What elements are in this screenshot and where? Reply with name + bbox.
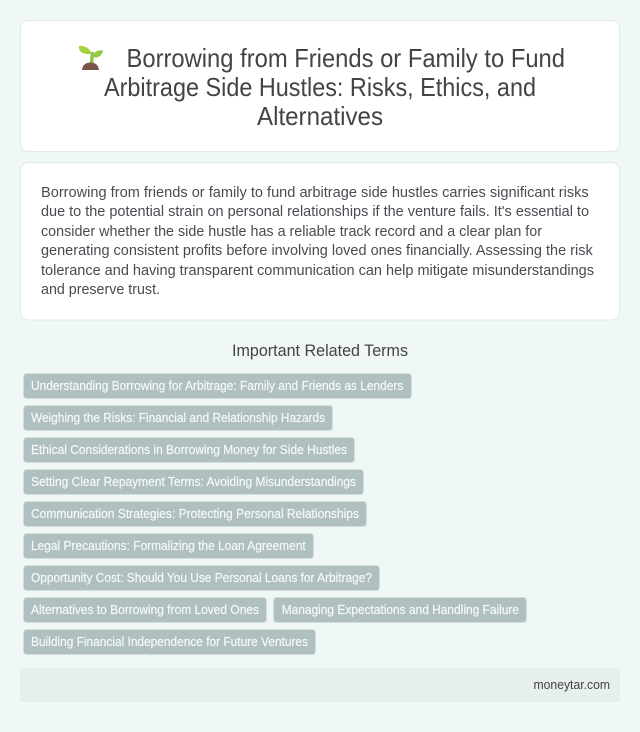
summary line 3: consider whether the side hustle has a reliable track record and a clear plan for bbox=[41, 223, 542, 240]
tag: opportunity cost: Opportunity Cost: Should You Use Personal Loans for Arbitrage? bbox=[31, 570, 372, 585]
tag: alternatives: Alternatives to Borrowing from Loved Ones bbox=[31, 602, 259, 617]
tag: communication strategies: Communication Strategies: Protecting Personal Relationships bbox=[31, 506, 359, 521]
tag: ethical considerations bbox=[24, 438, 354, 462]
summary line 2: due to the potential strain on personal relationships if the venture fails. It's essential to bbox=[41, 203, 589, 220]
tag: managing expectations bbox=[274, 598, 526, 622]
title line 1: Borrowing from Friends or Family to Fund bbox=[126, 43, 565, 73]
summary line 5: tolerance and having transparent communication can help mitigate misunderstandings bbox=[41, 262, 594, 279]
tag: understanding borrowing bbox=[24, 374, 412, 398]
tag: weighing the risks bbox=[24, 406, 332, 430]
title line 2: Arbitrage Side Hustles: Risks, Ethics, and bbox=[104, 72, 536, 102]
panel: title card bbox=[20, 20, 620, 152]
icon: seedling bbox=[79, 46, 103, 70]
tag: understanding borrowing: Understanding Borrowing for Arbitrage: Family and Friends as Lenders bbox=[31, 378, 404, 393]
tag: opportunity cost bbox=[24, 566, 380, 590]
footer bar bbox=[20, 668, 620, 702]
summary line 6: and preserve trust. bbox=[41, 281, 160, 298]
tag: ethical considerations: Ethical Considerations in Borrowing Money for Side Hustles bbox=[31, 442, 347, 457]
panel: summary card bbox=[20, 162, 620, 320]
tag: alternatives bbox=[24, 598, 266, 622]
tag: financial independence bbox=[24, 630, 316, 654]
summary line 1: Borrowing from friends or family to fund arbitrage side hustles carries significant risks bbox=[41, 184, 589, 201]
tag: weighing the risks: Weighing the Risks: Financial and Relationship Hazards bbox=[31, 410, 325, 425]
tag: financial independence: Building Financial Independence for Future Ventures bbox=[31, 634, 308, 649]
tag list bbox=[24, 374, 526, 654]
tag: legal precautions bbox=[24, 534, 314, 558]
tag: repayment terms bbox=[24, 470, 364, 494]
tag: legal precautions: Legal Precautions: Formalizing the Loan Agreement bbox=[31, 538, 306, 553]
footer source text: moneytar.com bbox=[534, 677, 610, 692]
tag: communication strategies bbox=[24, 502, 366, 526]
tag: repayment terms: Setting Clear Repayment Terms: Avoiding Misunderstandings bbox=[31, 474, 356, 489]
summary line 4: generating consistent profits before involving loved ones financially. Assessing the risk bbox=[41, 242, 593, 259]
heading: related terms: Important Related Terms bbox=[232, 342, 408, 360]
title line 3: Alternatives bbox=[257, 101, 383, 131]
tag: managing expectations: Managing Expectations and Handling Failure bbox=[282, 602, 519, 617]
